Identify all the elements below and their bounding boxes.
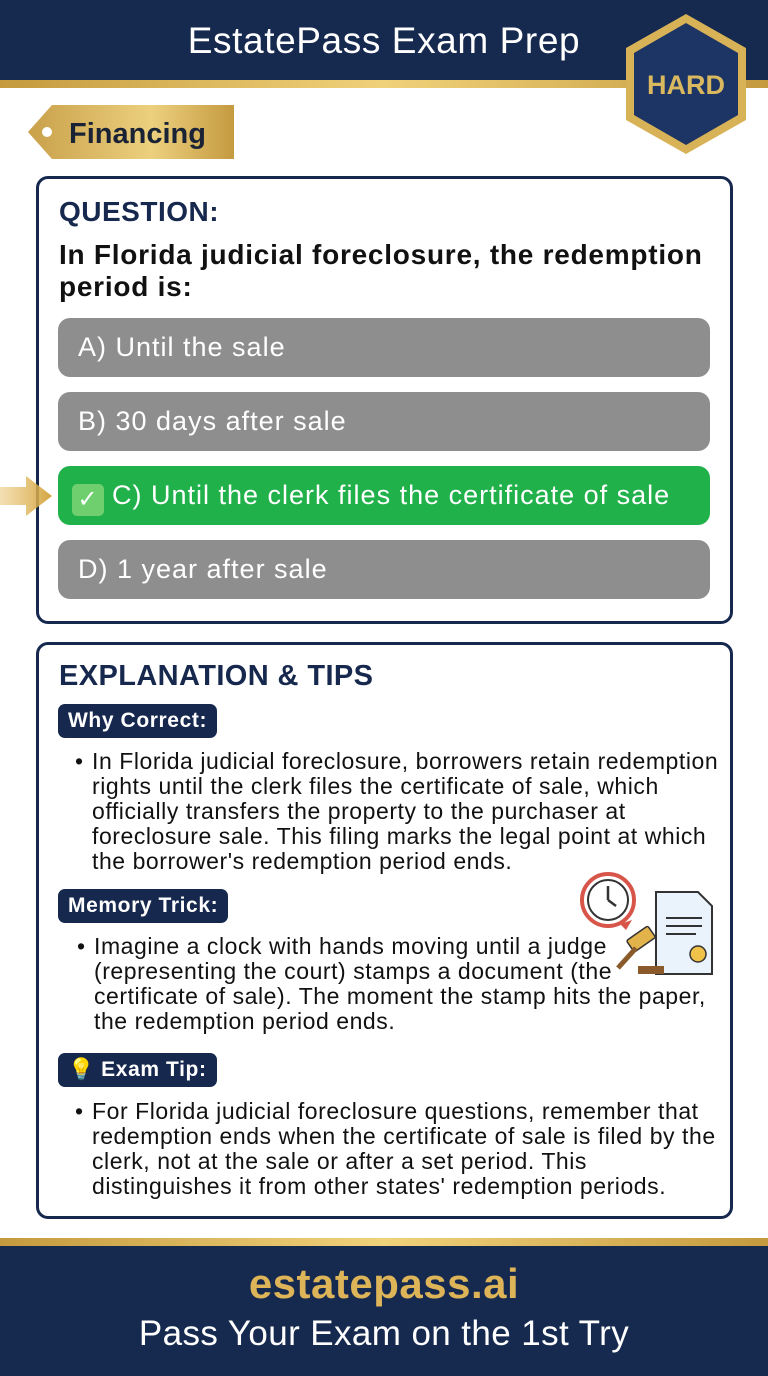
memory trick text: the redemption period ends. — [94, 1008, 395, 1034]
memory trick label: Memory Trick: — [68, 894, 218, 917]
title: EstatePass Exam Prep — [188, 20, 580, 61]
option C correct: ✓ — [77, 486, 99, 513]
why correct text: officially transfers the property to the purchaser at — [92, 798, 626, 824]
exam tip text: redemption ends when the certificate of sale is filed by the — [92, 1123, 716, 1149]
option C correct — [58, 466, 710, 525]
gold line — [0, 80, 768, 88]
icon: clock gavel certificate — [580, 872, 713, 975]
memory trick text: Imagine a clock with hands moving until a judge — [94, 933, 607, 959]
exam tip label: 💡 Exam Tip: — [68, 1058, 207, 1081]
why correct text: foreclosure sale. This filing marks the legal point at which — [92, 823, 706, 849]
why correct label: Why Correct: — [68, 709, 207, 732]
footer brand: estatepass.ai — [249, 1260, 519, 1307]
exam tip text: For Florida judicial foreclosure questions, remember that — [92, 1098, 699, 1124]
category tag — [28, 105, 234, 159]
panel: explanation — [36, 642, 733, 1219]
footer — [0, 1246, 768, 1376]
memory trick text — [94, 934, 734, 1034]
header bar — [0, 0, 768, 80]
option D — [58, 540, 710, 599]
panel: question — [36, 176, 733, 624]
why correct text: rights until the clerk files the certificate of sale, which — [92, 773, 659, 799]
exam tip label — [58, 1053, 217, 1087]
option A — [58, 318, 710, 377]
memory trick label — [58, 889, 228, 923]
question label: QUESTION: — [59, 196, 219, 227]
category tag: Financing — [69, 118, 206, 150]
option B: B) 30 days after sale — [78, 406, 347, 436]
why correct text — [92, 749, 732, 874]
badge: HARD: HARD — [647, 70, 725, 100]
why correct text: the borrower's redemption period ends. — [92, 848, 512, 874]
badge: HARD — [626, 14, 746, 154]
option A: A) Until the sale — [78, 332, 286, 362]
footer gold line — [0, 1238, 768, 1246]
why correct label — [58, 704, 217, 738]
exam tip text: distinguishes it from other states' redemption periods. — [92, 1173, 666, 1199]
question text: In Florida judicial foreclosure, the redemption period is: — [59, 239, 703, 302]
exam tip text — [92, 1099, 732, 1199]
option B — [58, 392, 710, 451]
memory trick text: (representing the court) stamps a document (the — [94, 958, 612, 984]
exam tip text: clerk, not at the sale or after a set period. This — [92, 1148, 587, 1174]
explanation heading: EXPLANATION & TIPS — [59, 660, 373, 692]
footer slogan: Pass Your Exam on the 1st Try — [139, 1314, 629, 1353]
option C correct: C) Until the clerk files the certificate of sale — [112, 480, 670, 510]
option D: D) 1 year after sale — [78, 554, 328, 584]
why correct text: In Florida judicial foreclosure, borrowers retain redemption — [92, 748, 718, 774]
arrow pointer — [0, 476, 52, 516]
memory trick text: certificate of sale). The moment the stamp hits the paper, — [94, 983, 706, 1009]
